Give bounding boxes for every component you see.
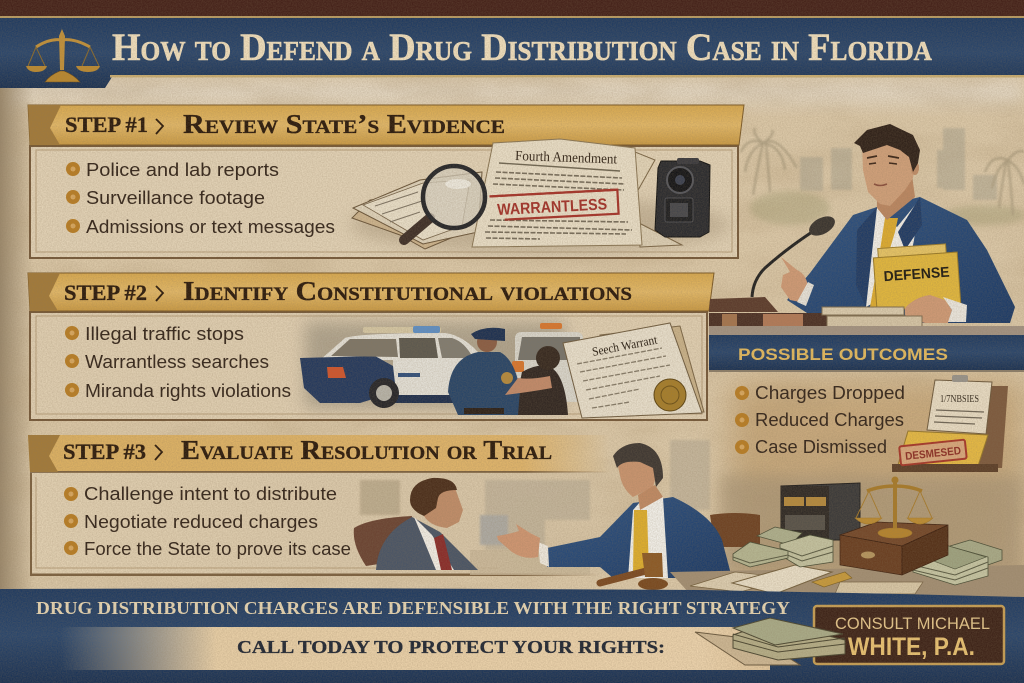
top wood strip: [0, 0, 1024, 16]
step 2 label: STEP #2: [64, 280, 147, 305]
outcomes list: Case Dismissed: [755, 437, 887, 457]
illustration: patrol cars: [300, 323, 583, 408]
step 2 heading: Identify Constitutional violations: [183, 276, 632, 306]
resting hand: [905, 295, 952, 323]
step 3 list: [64, 484, 351, 559]
brass scale: [855, 477, 933, 538]
panel: step 3: [28, 435, 760, 590]
pointing hand: [781, 257, 808, 303]
step 1 list: Surveillance footage: [86, 188, 265, 208]
illustration: attorney in suit: [781, 124, 1015, 323]
facial features: [867, 156, 899, 158]
step 1 list: Admissions or text messages: [86, 217, 335, 237]
panel: step 1: [28, 105, 744, 258]
step 3 list: Negotiate reduced charges: [84, 512, 318, 532]
illustration: gavel: [600, 553, 668, 590]
panel: attorney at podium: [709, 124, 1024, 335]
illustration: seated client: [354, 478, 478, 570]
wooden box: [840, 522, 948, 575]
step 1 body: [30, 146, 738, 258]
suit jacket: [787, 197, 1015, 323]
hair: [854, 124, 920, 172]
illustration: case papers: [352, 172, 482, 249]
step 1 label: STEP #1: [65, 112, 148, 137]
chevron: [155, 445, 162, 460]
folder: DEFENSE: [873, 243, 961, 311]
corner ornament: [28, 435, 60, 472]
step 2 header bar: [28, 273, 714, 311]
illustration: dismissed file: DESMESED: [905, 445, 962, 463]
folder: DEFENSE: DEFENSE: [883, 265, 950, 285]
illustration: dismissed file: [892, 375, 1008, 472]
podium ledge: [709, 326, 1024, 335]
step 1 heading: Review State’s Evidence: [183, 109, 505, 139]
illustration: Fourth Amendment document: Fourth Amendment: [515, 149, 617, 168]
stamp: warrantless: WARRANTLESS: [497, 196, 608, 219]
step 1 list: Police and lab reports: [86, 160, 279, 180]
step 2 list: Miranda rights violations: [85, 381, 291, 401]
outcomes list: Reduced Charges: [755, 410, 904, 430]
panel: hazy Florida skyline: [741, 128, 1024, 225]
icon: body camera: [655, 158, 710, 237]
step 3 label: STEP #3: [63, 439, 146, 464]
illustration: search warrant: [563, 323, 704, 418]
illustration: books and papers: [709, 297, 922, 329]
desk edge: [470, 550, 590, 575]
panel: bottom call to action: [0, 588, 1024, 683]
step 2 list: [65, 324, 291, 401]
illustration: Fourth Amendment document: [472, 139, 682, 247]
brown consult box: [814, 606, 1004, 664]
step 1 list: [66, 160, 335, 237]
panel: possible outcomes: [709, 335, 1024, 472]
step 3 list: Force the State to prove its case: [84, 539, 351, 559]
corner ornament: [28, 273, 60, 311]
step 3 header bar: [28, 435, 610, 472]
tie: [870, 218, 898, 307]
illustration: skyline behind negotiation: [360, 440, 710, 550]
scene shading: [305, 322, 565, 408]
illustration: desk with cash, safe and brass scale: [670, 477, 1024, 597]
step 1 header bar: [28, 105, 744, 145]
icon: magnifying glass: [404, 166, 485, 240]
illustration: microphone: [752, 212, 838, 297]
strategy tagline: DRUG DISTRIBUTION CHARGES ARE DEFENSIBLE WITH THE RIGHT STRATEGY: [36, 598, 790, 618]
step 3 list: Challenge intent to distribute: [84, 484, 337, 504]
step 2 list: Warrantless searches: [85, 352, 269, 372]
cream call strip: [60, 627, 770, 670]
outcomes list: [735, 383, 905, 457]
chevron: [156, 119, 163, 134]
desk top: [670, 565, 1024, 597]
brown consult box: WHITE, P.A.: [848, 633, 975, 661]
title banner: [0, 16, 1024, 88]
step 3 heading: Evaluate Resolution or Trial: [181, 435, 552, 465]
illustration: attorney in negotiation: [497, 443, 760, 578]
shirt: [864, 199, 920, 307]
icon: scales of justice: [26, 29, 100, 82]
outcomes banner: [709, 335, 1024, 370]
scene shading: [350, 197, 730, 253]
step 2 body: [30, 312, 707, 420]
title text: How to Defend a Drug Distribution Case in Florida: [112, 26, 932, 69]
safe: [781, 483, 860, 540]
outcomes heading: POSSIBLE OUTCOMES: [738, 345, 948, 364]
illustration: money stack: [695, 618, 845, 665]
outcomes list: Charges Dropped: [755, 383, 905, 403]
chevron: [156, 286, 163, 301]
step 3 body: [30, 473, 670, 574]
illustration: officer and suspect: [448, 328, 568, 415]
illustration: dismissed file: 1/7NBSIES: [940, 394, 979, 405]
consult text: CONSULT MICHAEL: [835, 614, 990, 633]
corner ornament: [28, 105, 61, 145]
documents on desk: [835, 582, 923, 594]
neck and face: [877, 175, 915, 220]
step 2 list: Illegal traffic stops: [85, 324, 244, 344]
panel: step 2: [28, 273, 714, 420]
call text: CALL TODAY TO PROTECT YOUR RIGHTS:: [237, 637, 665, 657]
cash stacks: [733, 527, 1002, 585]
illustration: search warrant: Seech Warrant: [591, 333, 659, 359]
